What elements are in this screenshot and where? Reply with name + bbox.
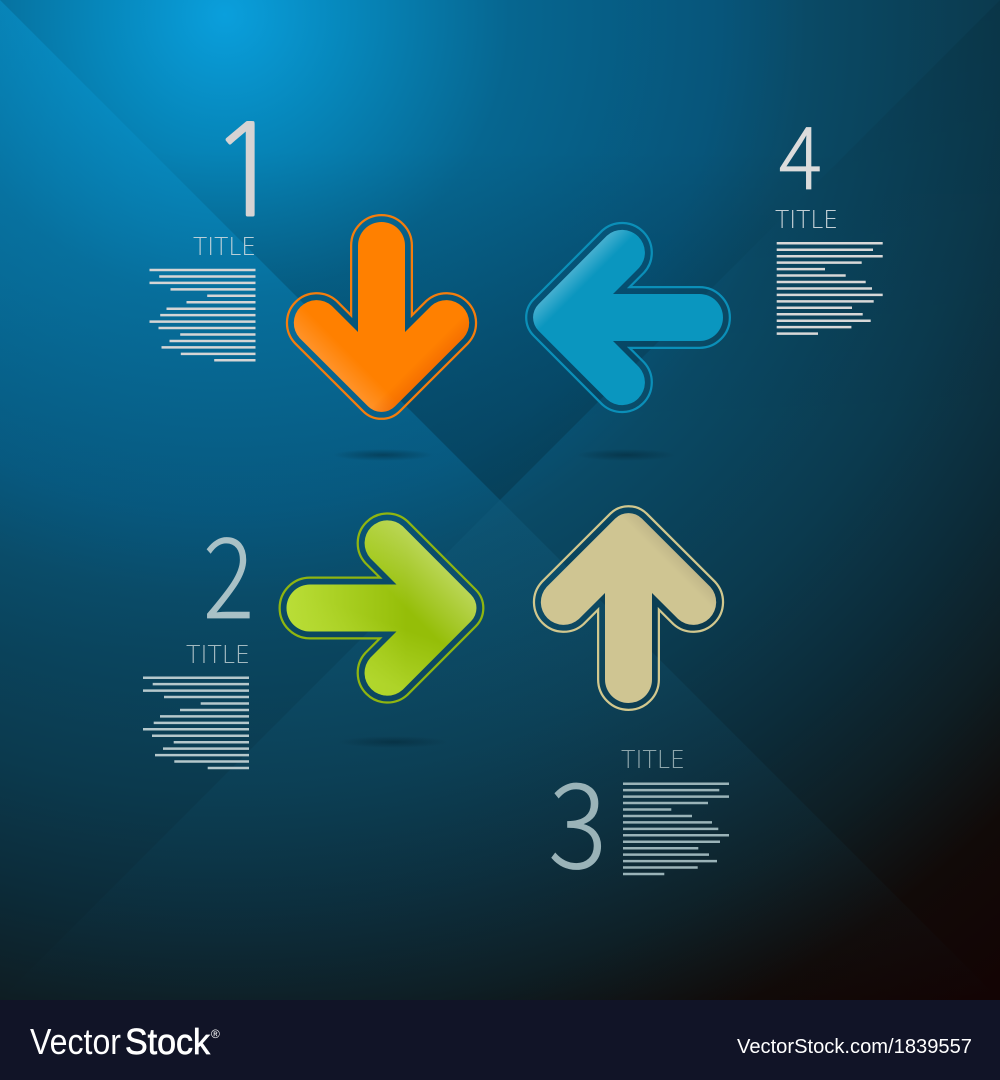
step 3 block: [548, 731, 729, 902]
number 1: 1: [207, 107, 285, 235]
logo: Stock: Stock: [125, 1021, 211, 1062]
number 2: 2: [203, 488, 254, 650]
step 4 block: [775, 90, 883, 334]
title 2: TITLE: [186, 640, 250, 669]
text lines 2: [143, 678, 249, 768]
text lines 3: [623, 784, 729, 874]
shadow: orange arrow: [333, 449, 433, 461]
number 3: 3: [548, 731, 607, 902]
arrow 3: tan up arrow: [541, 513, 716, 703]
step 2 block: [143, 488, 254, 768]
text lines 1: [150, 270, 256, 360]
title 1: TITLE: [193, 232, 256, 261]
arrow 4: blue left arrow: [533, 230, 723, 405]
arrow 2: green right arrow: [287, 520, 476, 696]
title 4: TITLE: [775, 205, 838, 234]
logo: Vector: Vector: [30, 1021, 121, 1062]
title 3: TITLE: [621, 745, 685, 774]
number 4: 4: [779, 90, 822, 215]
image id: VectorStock.com/1839557: [737, 1036, 972, 1058]
arrow 1: orange down arrow: [294, 222, 469, 412]
footer bar: [0, 1000, 1000, 1080]
shadow: blue arrow: [576, 449, 676, 461]
text lines 4: [777, 243, 883, 334]
registered mark: ®: [211, 1027, 220, 1041]
step 1 block: [150, 107, 285, 360]
shadow: green arrow: [338, 736, 448, 748]
